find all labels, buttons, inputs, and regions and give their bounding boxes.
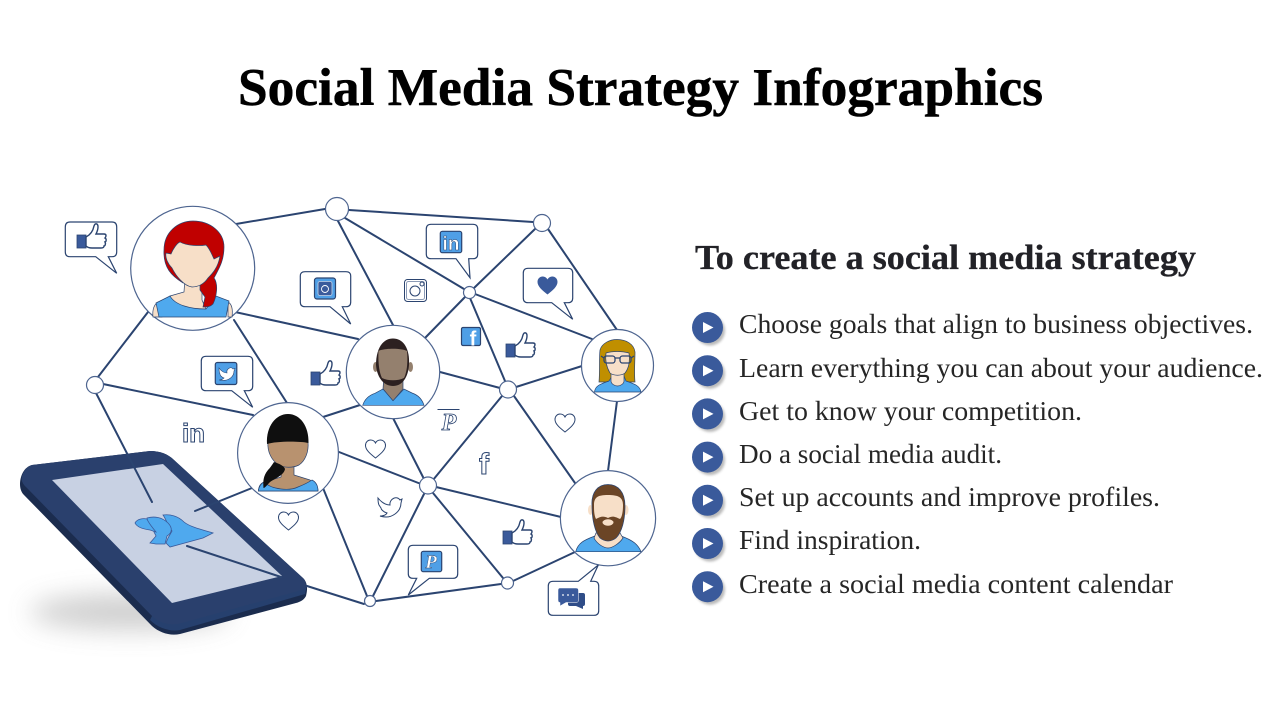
- speech bubble: chat: [548, 565, 599, 615]
- step 4: Do a social media audit.: [739, 439, 1002, 469]
- icon: heart outlines: [278, 414, 575, 530]
- step 7: Create a social media content calendar: [739, 569, 1173, 599]
- network illustration: [20, 198, 656, 635]
- avatar: woman with ponytail: [238, 403, 338, 503]
- icon: linkedin outline: in: [182, 418, 205, 448]
- tablet people icon: [135, 515, 213, 547]
- speech bubble: twitter: [201, 356, 253, 407]
- icon: instagram outline: [404, 280, 426, 302]
- icon: twitter outline: [378, 498, 402, 517]
- speech bubble: linkedin: in: [443, 234, 459, 255]
- avatar: dark-skinned man: [346, 325, 440, 419]
- speech bubble: instagram: [300, 272, 351, 324]
- speech bubble: pinterest: P: [424, 552, 437, 573]
- title: Social Media Strategy Infographics: [238, 59, 1043, 117]
- step 3: Get to know your competition.: [739, 396, 1082, 426]
- speech bubble: thumbs up: [65, 222, 117, 273]
- tablet shadow: [30, 594, 230, 630]
- heading: To create a social media strategy: [695, 238, 1197, 277]
- network nodes: [86, 198, 550, 606]
- avatar: woman with glasses: [582, 330, 654, 402]
- speech bubble: linkedin: [426, 224, 478, 278]
- step 1: Choose goals that align to business objectives.: [739, 309, 1253, 339]
- step 6: [692, 525, 921, 562]
- speech bubble: heart: [523, 268, 573, 319]
- avatar: bearded man: [560, 471, 656, 566]
- icon: pinterest outline: P: [441, 410, 457, 436]
- icon: pinterest outline: [438, 410, 460, 436]
- icon: thumbs up group: [311, 333, 535, 544]
- tablet screen: [52, 464, 282, 603]
- list of strategy steps: [692, 309, 1263, 605]
- icon: facebook outline: f: [479, 448, 490, 481]
- speech bubble: pinterest: [408, 545, 458, 595]
- step 5: Set up accounts and improve profiles.: [739, 482, 1160, 512]
- step 2: Learn everything you can about your audience.: [739, 353, 1263, 383]
- connection lines: [96, 209, 617, 604]
- avatar: red-haired woman: [131, 206, 255, 330]
- icon: facebook square: [462, 328, 480, 350]
- icon: facebook square: f: [470, 328, 477, 350]
- step 6: Find inspiration.: [739, 525, 921, 555]
- tablet device: [20, 451, 307, 635]
